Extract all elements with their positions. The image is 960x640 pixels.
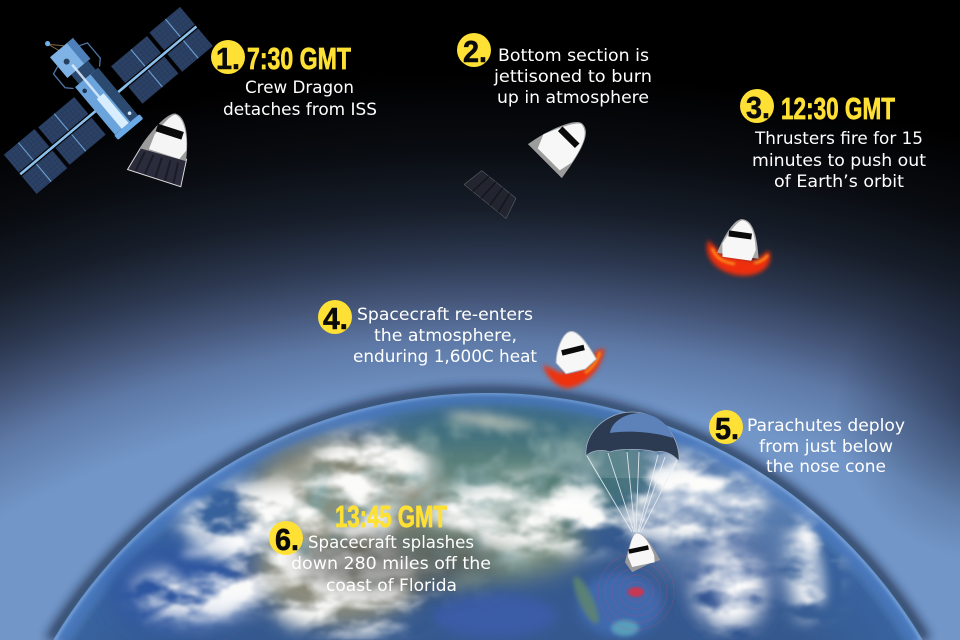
capsule 4 with re-entry flame — [545, 327, 603, 387]
description 4: enduring 1,600C heat — [353, 347, 538, 366]
description 4 — [353, 305, 538, 366]
badge 6: 6. — [275, 522, 299, 557]
badge 3: 3. — [746, 90, 770, 125]
description 2: Bottom section is — [498, 46, 649, 65]
capsule 3 with re-entry flame — [709, 216, 769, 274]
description 5: the nose cone — [766, 457, 886, 476]
wing spar — [20, 26, 196, 174]
solar panels — [4, 7, 213, 194]
description 5: from just below — [759, 437, 893, 456]
description 3: minutes to push out — [752, 151, 927, 170]
jettisoned trunk — [464, 167, 520, 219]
canopy skirt — [587, 449, 678, 478]
step 4 label — [318, 300, 538, 366]
description 3: of Earth’s orbit — [774, 172, 905, 191]
step 2 label — [457, 33, 652, 107]
background: right side shading — [800, 260, 960, 560]
satellite (ISS) — [0, 0, 220, 202]
badge 4: 4. — [323, 301, 348, 336]
description 2 — [493, 46, 652, 107]
description 1: detaches from ISS — [223, 100, 377, 119]
capsule 2 — [528, 107, 599, 178]
canopy — [586, 412, 679, 461]
suspension lines — [587, 452, 677, 532]
step 3 label — [740, 89, 927, 191]
text shade behind step 6 — [295, 532, 495, 592]
haze over the Atlantic — [635, 450, 805, 590]
shallows — [611, 620, 639, 636]
badge 2: 2. — [463, 34, 487, 69]
description 1: Crew Dragon — [245, 78, 354, 97]
description 4: Spacecraft re-enters — [357, 305, 533, 324]
description 6 — [291, 533, 491, 595]
description 6: down 280 miles off the — [291, 554, 491, 573]
coast: Florida — [572, 576, 600, 625]
station body — [34, 22, 148, 144]
badge 1: 1. — [216, 41, 240, 76]
description 4: the atmosphere, — [374, 326, 517, 345]
step 5 label — [709, 410, 905, 476]
description 6: Spacecraft splashes — [308, 533, 474, 552]
description 6: coast of Florida — [326, 576, 457, 595]
badge 5: 5. — [715, 411, 739, 446]
description 3 — [752, 129, 927, 191]
description 5 — [747, 416, 905, 476]
step 1 label — [211, 40, 377, 119]
time 7:30 GMT: 7:30 GMT — [247, 41, 351, 76]
time 12:30 GMT: 12:30 GMT — [781, 91, 895, 126]
description 2: jettisoned to burn — [493, 67, 652, 86]
parachute with capsule — [586, 412, 679, 573]
capsule 5 — [620, 530, 662, 573]
earth — [0, 380, 960, 640]
capsule 1 with trunk — [128, 105, 202, 187]
description 2: up in atmosphere — [497, 88, 649, 107]
description 3: Thrusters fire for 15 — [754, 129, 923, 148]
description 5: Parachutes deploy — [747, 416, 905, 435]
description 1 — [223, 78, 377, 119]
splashdown target — [598, 554, 674, 630]
time 13:45 GMT: 13:45 GMT — [335, 499, 447, 534]
step 6 label — [269, 499, 491, 595]
